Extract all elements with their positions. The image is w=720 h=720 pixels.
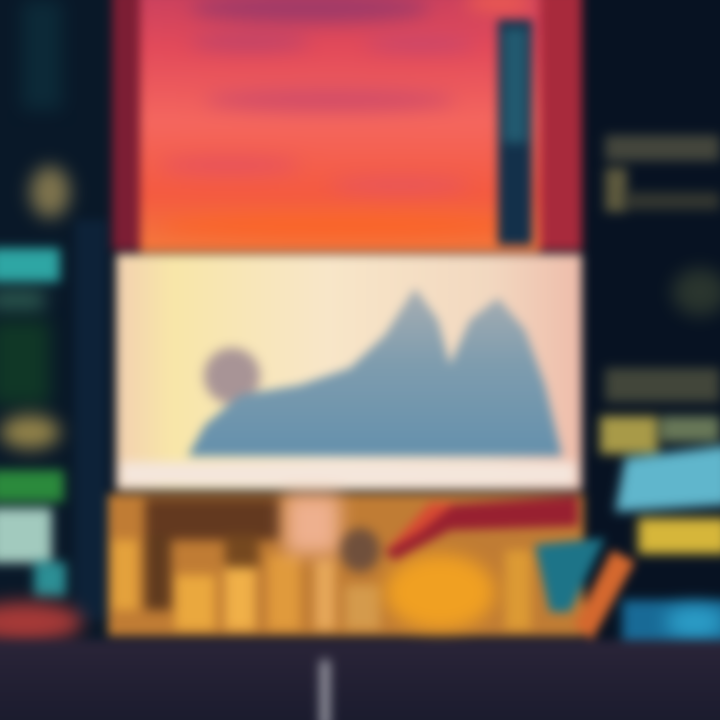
chart panel	[116, 254, 582, 490]
brown figure	[145, 498, 280, 610]
ground	[0, 640, 720, 720]
sunset sky	[140, 0, 540, 252]
area chart	[188, 288, 562, 456]
left building	[0, 0, 110, 642]
cloud streaks	[160, 0, 535, 238]
orange wedge	[574, 550, 635, 640]
lower illustration row	[108, 494, 635, 640]
red ribbon	[385, 496, 578, 560]
road marking	[320, 660, 330, 720]
orange base	[108, 494, 584, 636]
red frame edges	[112, 0, 142, 250]
vertical light and dark streaks	[112, 540, 531, 630]
sky panel	[112, 0, 582, 252]
teal wedge	[535, 538, 605, 612]
right building	[590, 0, 720, 658]
dark pillar	[498, 20, 532, 245]
pale billboard	[116, 254, 582, 490]
chart baseline band	[120, 462, 576, 486]
warm highlights	[285, 494, 495, 630]
